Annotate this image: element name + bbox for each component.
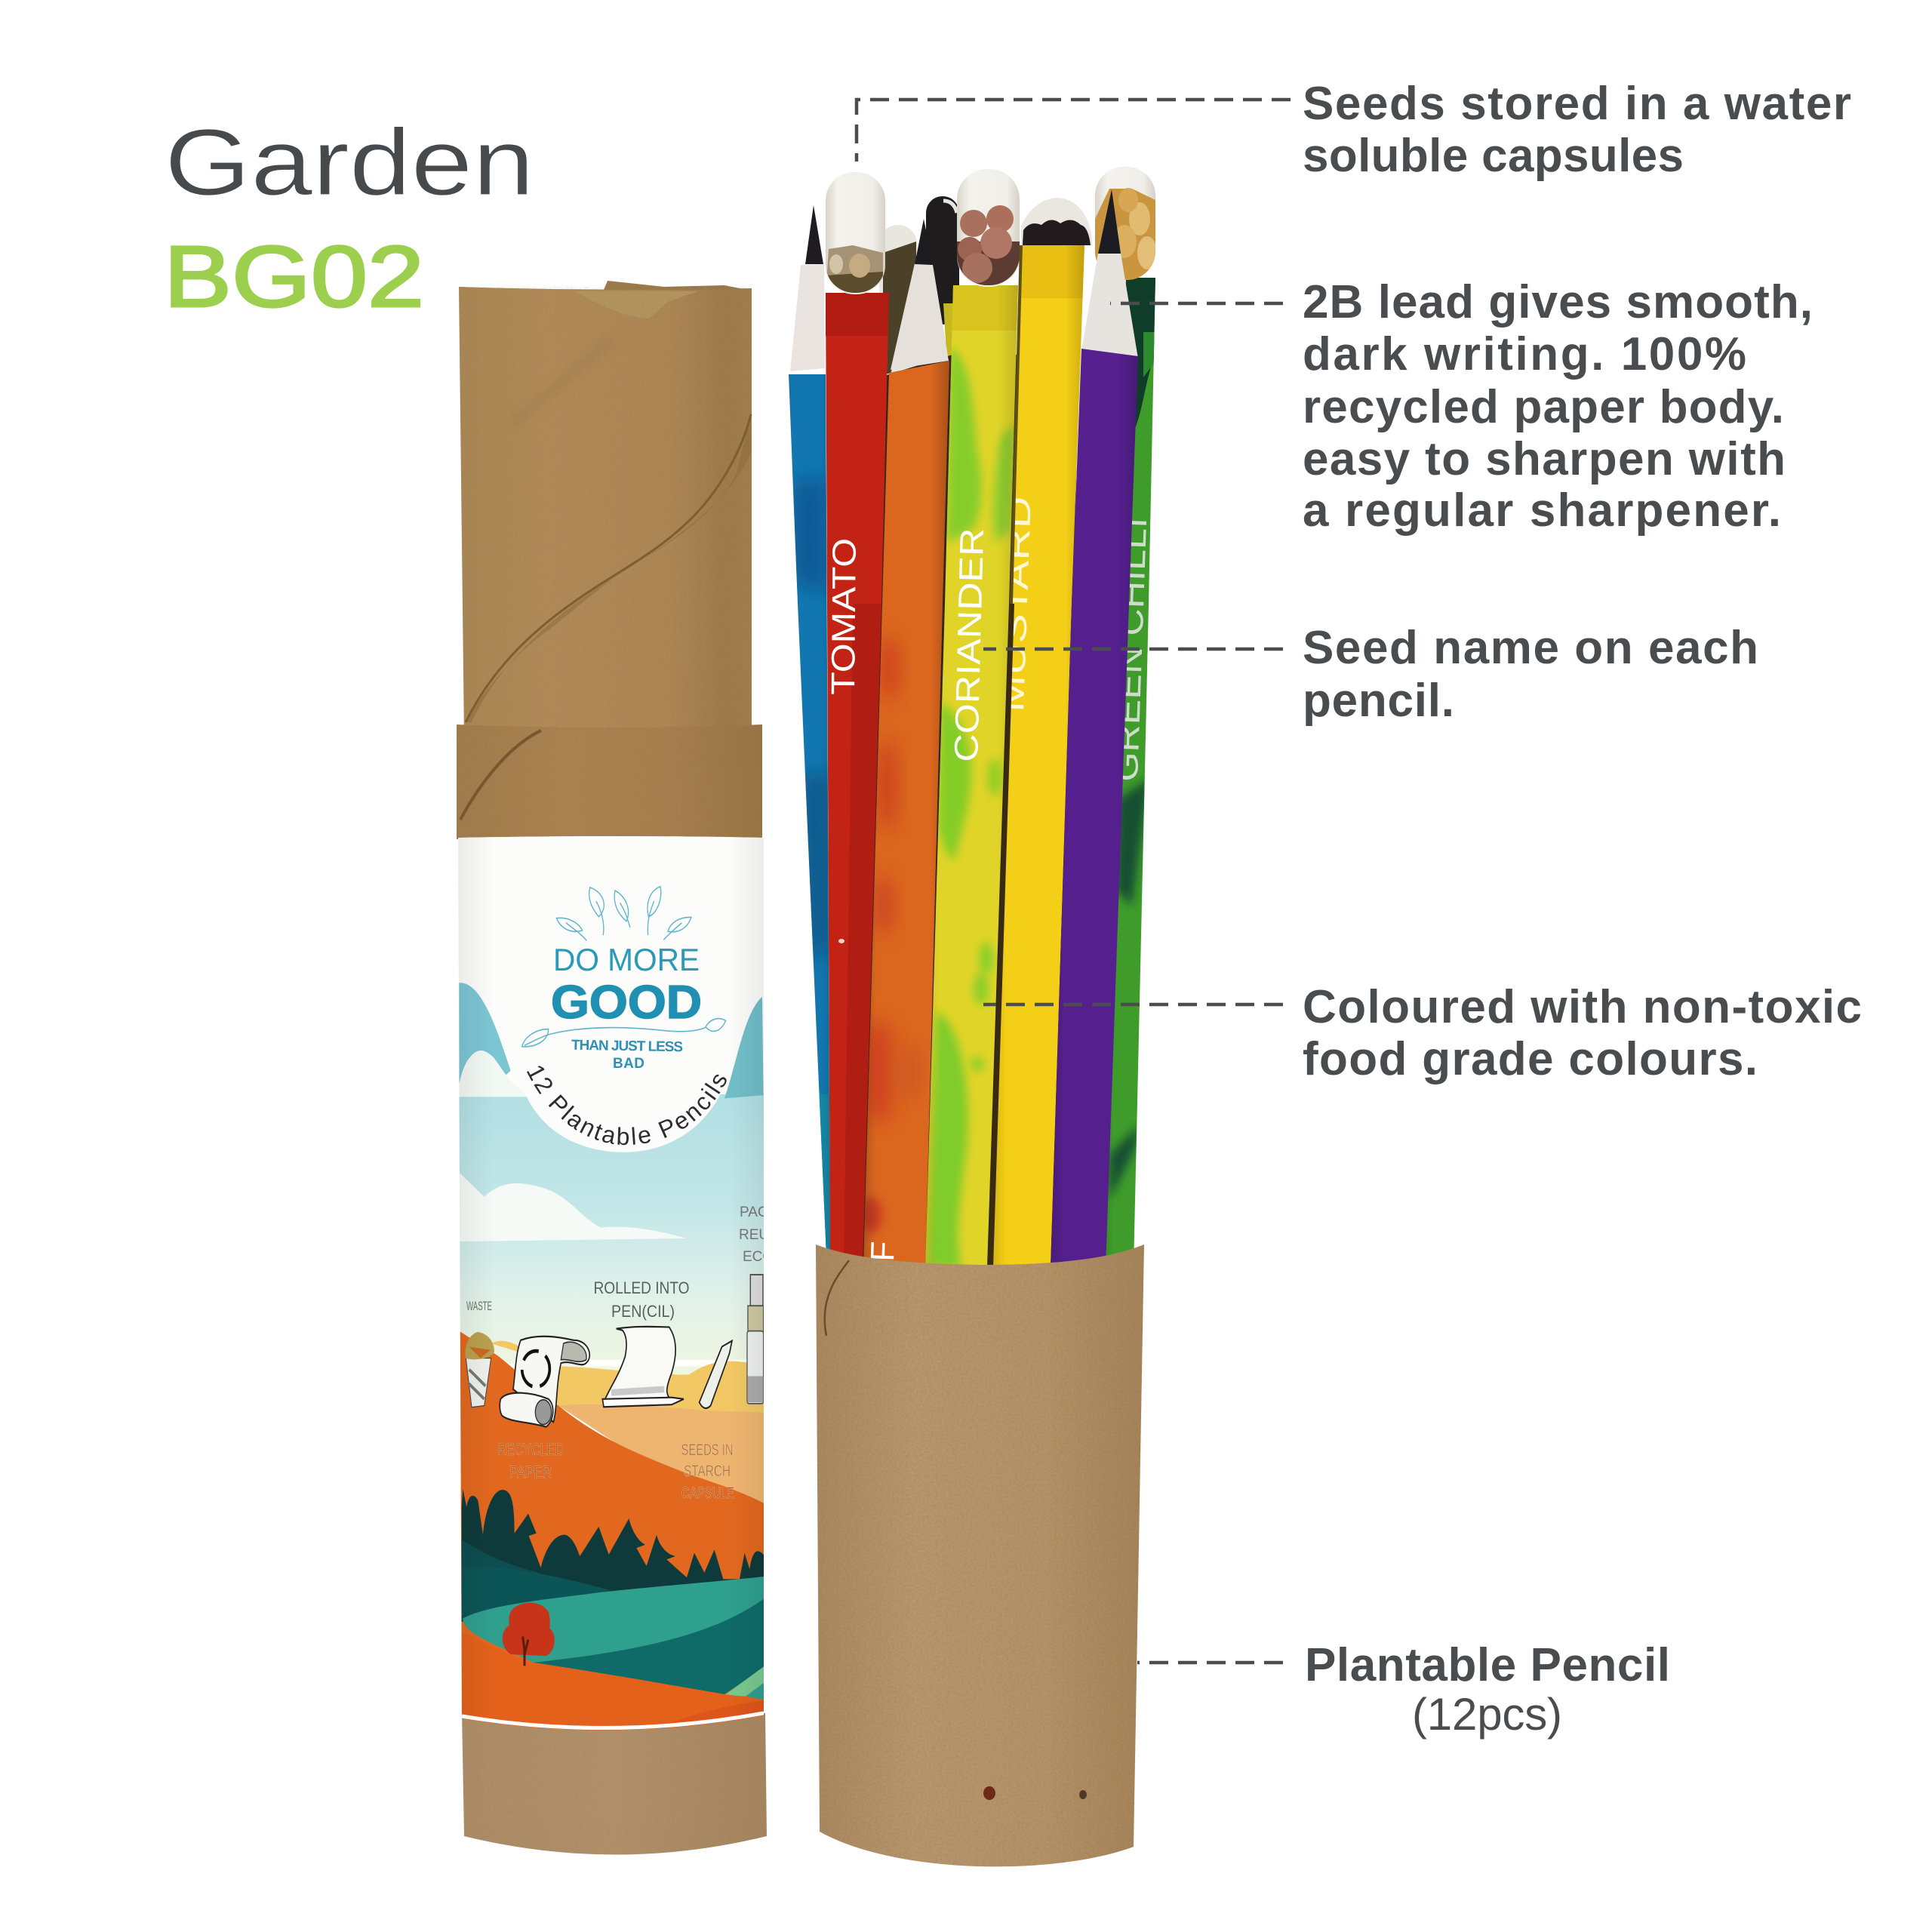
paper label: GOOD	[551, 977, 702, 1029]
paper label: STARCH	[684, 1463, 731, 1480]
paper label: PEN(CIL)	[611, 1302, 675, 1321]
paper label: THAN JUST LESS	[571, 1038, 683, 1055]
callout: lead and body: easy to sharpen with	[1303, 433, 1786, 485]
mustard name: MUSTARD	[994, 496, 1038, 712]
label landscape	[458, 1275, 764, 1746]
pencil: coriander	[921, 169, 1020, 1270]
label process captions, upper: PACKED	[740, 1204, 798, 1220]
icon: recycled paper scroll	[500, 1337, 589, 1427]
paper label: CAPSULE	[681, 1484, 734, 1502]
pencil: orange	[860, 219, 951, 1270]
coriander name: CORIANDER	[948, 528, 991, 762]
paper label: ROLLED INTO	[593, 1278, 690, 1297]
paper label: SEEDS IN	[681, 1441, 734, 1459]
icon: waste cup	[465, 1332, 494, 1407]
label curved text	[526, 1070, 731, 1145]
callout: food grade colours: food grade colours.	[1303, 1033, 1758, 1085]
callout: lead and body: recycled paper body.	[1303, 381, 1784, 433]
right kraft tube holder	[811, 1238, 1151, 1879]
label leaves logo	[522, 887, 726, 1047]
label sky	[453, 1094, 770, 1411]
mustard capsule	[1021, 198, 1092, 245]
callout: seeds capsules: soluble capsules	[1303, 130, 1684, 182]
pencil: tomato	[825, 172, 889, 1268]
orange pencil name fragment: F	[864, 1241, 902, 1262]
callout: seed name	[983, 622, 1758, 727]
icon: pencil	[700, 1341, 732, 1408]
paper label: PAPER	[509, 1463, 552, 1481]
paper label: REUSABLE	[739, 1227, 815, 1243]
paper label: BAD	[613, 1056, 645, 1072]
green chilli capsule	[1095, 167, 1157, 281]
callout: plantable pencil quantity: Plantable Pencil	[1305, 1639, 1670, 1691]
subtitle: product code BG02: BG02	[164, 229, 424, 325]
icon: paper rolled onto pencil	[602, 1327, 684, 1407]
left kraft tube with label	[457, 281, 767, 1855]
callout: seed name: Seed name on each	[1303, 622, 1758, 674]
callout: lead and body: a regular sharpener.	[1303, 485, 1781, 537]
tomato capsule	[826, 172, 885, 294]
callout: food grade colours: Coloured with non-toxic	[1303, 981, 1862, 1033]
paper label	[458, 836, 764, 1730]
tree	[503, 1603, 555, 1656]
forest silhouette	[462, 1489, 764, 1622]
callout: food grade colours	[983, 981, 1862, 1085]
title: Garden: Garden	[165, 110, 534, 215]
paper label: ECO-FR	[743, 1249, 798, 1265]
back capsules	[879, 196, 959, 377]
tube sleeve	[457, 724, 762, 839]
pencil: green chilli	[1095, 167, 1170, 1274]
callout: lead and body	[1110, 276, 1813, 537]
bundle of plantable pencils	[785, 167, 1170, 1275]
tube paper grain	[466, 287, 752, 290]
callout: seeds capsules	[857, 78, 1851, 182]
paper label: 12 Plantable Pencils	[527, 1066, 727, 1146]
label slogan: DO MORE	[553, 942, 700, 977]
tube bottom	[462, 1713, 767, 1855]
callout: lead and body: dark writing. 100%	[1303, 328, 1746, 380]
callout: seeds capsules: Seeds stored in a water	[1303, 78, 1851, 130]
pencil: purple	[1051, 189, 1138, 1268]
tube upper section	[459, 287, 752, 740]
label process captions, lower: WASTE	[466, 1299, 492, 1313]
pencil: blue	[785, 205, 830, 1260]
pencil: mustard	[988, 198, 1092, 1272]
label art, upper	[459, 815, 764, 1241]
callout: lead and body: 2B lead gives smooth,	[1303, 276, 1813, 328]
label cylinder shading	[457, 834, 766, 1747]
paper label: RECYCLED	[497, 1440, 564, 1459]
callout: plantable pencil quantity	[1137, 1639, 1670, 1740]
icon: package tube	[747, 1275, 764, 1404]
tomato name: TOMATO	[825, 538, 863, 695]
callout: seed name: pencil.	[1303, 675, 1454, 727]
green chilli name: GREEN CHILLI	[1108, 517, 1154, 782]
label white rim	[462, 1713, 764, 1728]
coriander capsule	[957, 169, 1020, 287]
dark gaps between pencils	[860, 355, 1079, 1275]
callout: plantable pencil quantity: (12pcs)	[1412, 1689, 1562, 1740]
hills	[462, 1540, 611, 1620]
